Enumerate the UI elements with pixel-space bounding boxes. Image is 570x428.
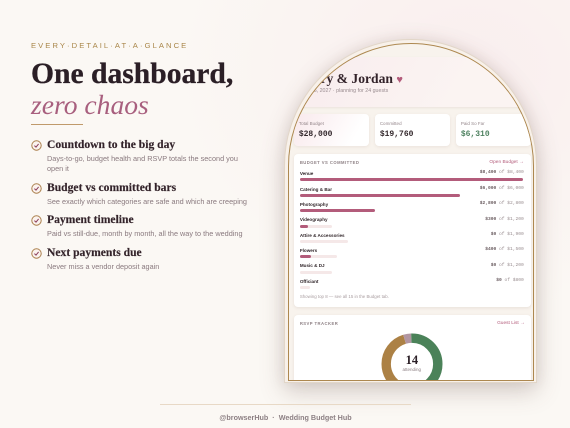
total budget value: $28,000 — [299, 130, 332, 139]
feature: countdown: open it — [47, 164, 69, 173]
donut count: 14 — [406, 353, 418, 367]
arch dashboard screenshot: Photography — [300, 202, 328, 207]
paid value: $6,310 — [461, 130, 490, 139]
arch dashboard screenshot: $0 of $800 — [496, 278, 524, 283]
icon: check — [31, 183, 42, 194]
heading — [30, 58, 233, 120]
arch dashboard screenshot — [288, 43, 534, 381]
feature: countdown: Countdown to the big day — [47, 138, 175, 151]
committed value: $19,760 — [380, 130, 413, 139]
arch dashboard screenshot: $0 of $1,200 — [491, 263, 524, 268]
arch dashboard screenshot: Venue — [300, 171, 313, 176]
arch dashboard screenshot: Total Budget — [299, 121, 324, 126]
stat card: total budget — [294, 114, 369, 146]
heading rule — [31, 124, 83, 125]
arch dashboard screenshot: Music & DJ — [300, 263, 325, 268]
stat card: paid — [456, 114, 531, 146]
panel heading: RSVP TRACKER — [300, 321, 338, 326]
feature: payment timeline: Payment timeline — [47, 213, 134, 226]
panel: rsvp tracker — [294, 315, 531, 395]
arch dashboard screenshot: Videography — [300, 217, 328, 222]
table note: Showing top 8 — see all 15 in the Budget tab. — [300, 294, 389, 299]
date line: June 13, 2027 · planning for 24 guests — [298, 88, 388, 94]
feature: countdown — [31, 138, 238, 173]
arch dashboard screenshot: $2,800 of $2,800 — [480, 201, 524, 206]
link: guest list: Guest List → — [497, 321, 525, 326]
footer rule and credit: @browserHub · Wedding Budget Hub — [219, 413, 352, 422]
feature: budget bars: See exactly which categories are safe and which are creeping — [47, 197, 247, 206]
icon: check — [31, 248, 42, 259]
arch dashboard screenshot: Officiant — [300, 279, 318, 284]
arch dashboard screenshot: Flowers — [300, 248, 317, 253]
feature: payment timeline — [31, 213, 242, 238]
feature: countdown: Days-to-go, budget health and RSVP totals the second you — [47, 154, 238, 163]
feature: next payments: Never miss a vendor deposit again — [47, 262, 159, 271]
feature: budget bars — [31, 181, 247, 206]
stat card: committed — [375, 114, 450, 146]
arch dashboard screenshot: Committed — [380, 121, 402, 126]
heading: zero chaos — [31, 89, 149, 120]
link: open budget: Open Budget → — [489, 160, 524, 165]
donut chart — [382, 334, 442, 380]
icon: check — [31, 140, 42, 151]
feature: budget bars: Budget vs committed bars — [47, 181, 176, 194]
panel heading: BUDGET VS COMMITTED — [300, 160, 359, 165]
arch dashboard screenshot: Catering & Bar — [300, 187, 332, 192]
feature: next payments — [31, 246, 159, 271]
dashboard header — [289, 57, 535, 107]
arch dashboard screenshot: $400 of $1,500 — [485, 247, 524, 252]
arch dashboard screenshot: Paid So Far — [461, 121, 485, 126]
arch dashboard screenshot: $0 of $1,900 — [491, 232, 524, 237]
panel: budget vs committed — [294, 154, 531, 307]
heading: One dashboard, — [31, 58, 233, 90]
couple name: Avery & Jordan ♥ — [299, 71, 403, 86]
eyebrow label: EVERY·DETAIL·AT·A·GLANCE — [31, 41, 188, 50]
icon: check — [31, 215, 42, 226]
arch dashboard screenshot: $6,000 of $6,000 — [480, 186, 524, 191]
arch dashboard screenshot: Attire & Accessories — [300, 233, 345, 238]
arch frame outer — [284, 39, 537, 383]
arch dashboard screenshot: $300 of $1,200 — [485, 217, 524, 222]
arch dashboard screenshot: $8,400 of $8,400 — [480, 170, 524, 175]
donut caption: attending — [403, 367, 421, 372]
feature: next payments: Next payments due — [47, 246, 142, 259]
feature: payment timeline: Paid vs still-due, month by month, all the way to the wedding — [47, 229, 242, 238]
